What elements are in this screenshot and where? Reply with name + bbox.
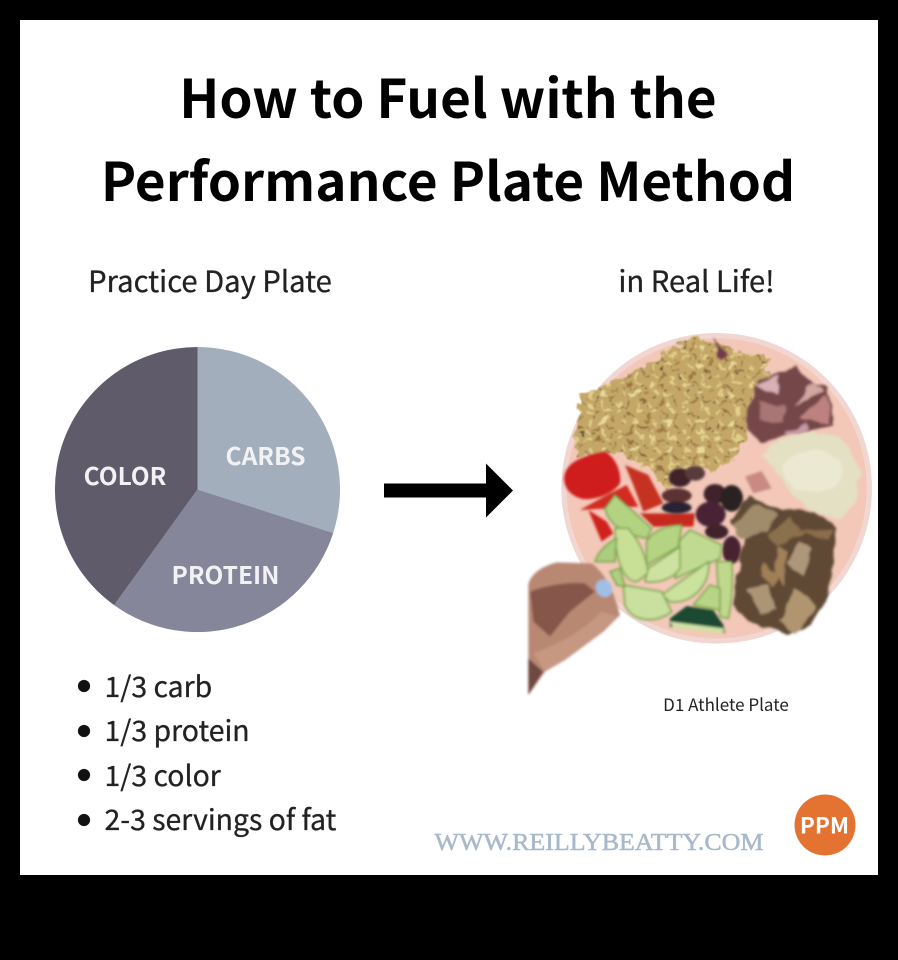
plate: [561, 333, 872, 644]
heading: practice day plate: Practice Day Plate: [88, 259, 332, 301]
cucumbers: [595, 495, 732, 633]
tomatoes: [564, 452, 695, 542]
photo: plate with food and hand: [528, 333, 872, 695]
hand: [528, 562, 620, 695]
arrow: [384, 464, 513, 518]
bullet: fat: 2-3 servings of fat: [104, 798, 337, 839]
bullet: color: 1/3 color: [104, 754, 222, 795]
olives: [662, 466, 743, 564]
label: protein: PROTEIN: [172, 557, 279, 592]
title: Performance Plate Method: [101, 141, 795, 217]
red onion: [713, 340, 835, 442]
chicken: [730, 495, 837, 633]
logo: PPM: [800, 808, 849, 840]
bullet list: [78, 665, 337, 839]
title: [101, 58, 795, 217]
caption: D1 Athlete Plate: [663, 691, 789, 716]
website url: WWW.REILLYBEATTY.COM: [434, 830, 764, 856]
rice: [575, 338, 770, 488]
label: carbs: CARBS: [226, 438, 306, 473]
logo: [794, 794, 856, 856]
bullet: carb: 1/3 carb: [104, 665, 212, 706]
onion pieces centre: [745, 471, 772, 493]
slice: protein: [114, 490, 333, 632]
label: color: COLOR: [84, 458, 167, 493]
heading: in real life: in Real Life!: [618, 259, 775, 301]
bullet: protein: 1/3 protein: [104, 709, 250, 750]
slice: color: [55, 347, 198, 605]
pie chart: [55, 347, 340, 632]
sauce: [763, 432, 860, 520]
title: How to Fuel with the: [179, 58, 717, 134]
slice: carbs: [198, 347, 340, 533]
